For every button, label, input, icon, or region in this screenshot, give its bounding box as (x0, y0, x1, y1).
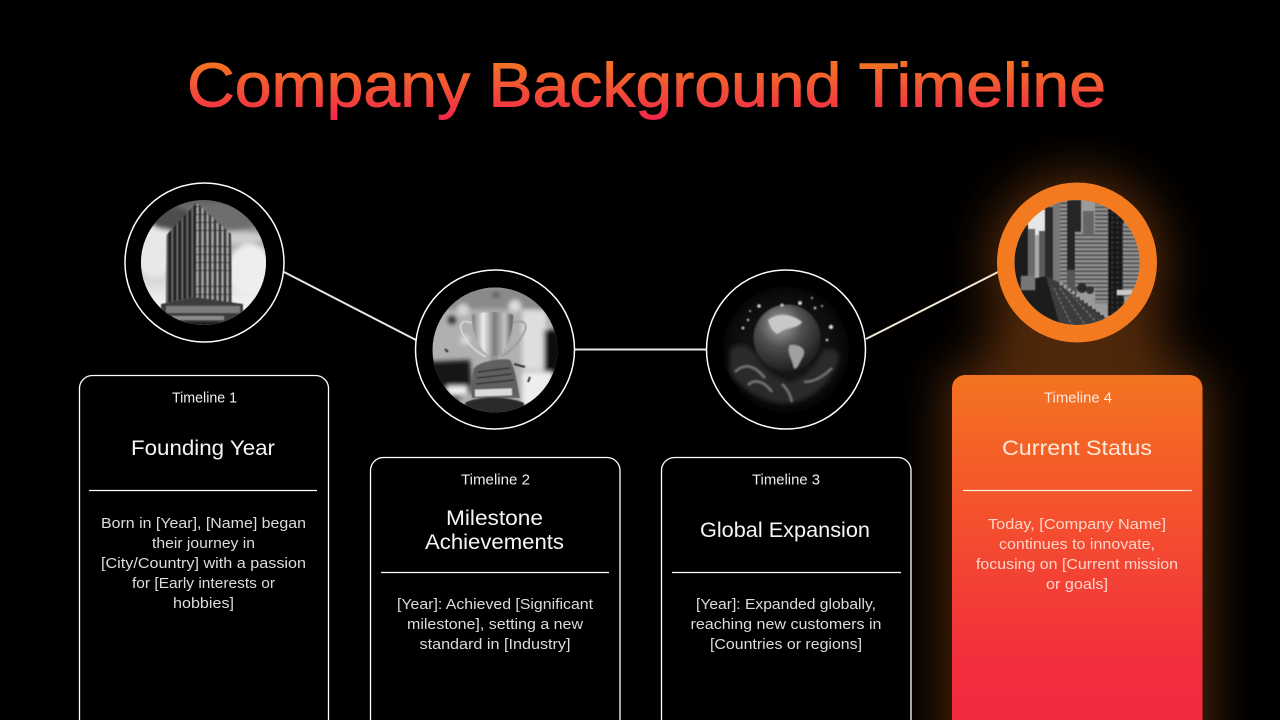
panel: timeline 1 founding year (80, 376, 328, 720)
panel: timeline 3 global expansion (662, 458, 911, 720)
panel: timeline 3 global expansion: Timeline 3 (752, 472, 820, 488)
icon: global expansion globe photo (706, 270, 866, 429)
panel: timeline 2 milestone achievements: standard in [Industry] (420, 637, 570, 653)
panel: timeline 3 global expansion: Global Expansion (700, 518, 870, 542)
panel: timeline 4 current status: Today, [Company Name] (988, 517, 1166, 533)
title: Company Background Timeline (187, 52, 1106, 120)
icon: founding building photo (125, 183, 284, 342)
panel: timeline 3 global expansion: [Countries or regions] (710, 637, 862, 653)
icon: current status city photo (1006, 192, 1148, 334)
panel: timeline 1 founding year: hobbies] (173, 596, 234, 612)
panel: timeline 1 founding year: Born in [Year], [Name] began (101, 516, 306, 532)
panel: timeline 2 milestone achievements: Milestone (446, 506, 543, 530)
panel: timeline 4 current status: focusing on [Current mission (976, 557, 1178, 573)
panel: timeline 3 global expansion: reaching new customers in (690, 617, 882, 633)
connector: milestone 1 to 2 (284, 272, 416, 340)
panel: timeline 4 current status: Timeline 4 (1044, 390, 1112, 406)
panel: timeline 2 milestone achievements: milestone], setting a new (407, 617, 584, 633)
panel: timeline 3 global expansion: [Year]: Expanded globally, (696, 597, 876, 613)
panel: timeline 2 milestone achievements: [Year]: Achieved [Significant (397, 597, 593, 613)
panel: timeline 4 current status: continues to innovate, (999, 537, 1155, 553)
panel: timeline 2 milestone achievements: Timeline 2 (461, 472, 530, 488)
panel: timeline 1 founding year: Timeline 1 (172, 390, 237, 406)
connector: milestone 3 to 4 (866, 271, 1000, 339)
panel: timeline 1 founding year: Founding Year (131, 436, 275, 460)
orange glow behind current status (944, 172, 1210, 720)
panel: timeline 2 milestone achievements (370, 458, 620, 720)
panel: timeline 1 founding year: for [Early interests or (132, 576, 275, 592)
panel: timeline 4 current status: or goals] (1046, 577, 1108, 593)
panel: timeline 4 current status: Current Status (1002, 436, 1152, 460)
icon: milestone trophy photo (416, 270, 574, 429)
panel: timeline 1 founding year: their journey in (152, 536, 255, 552)
connector: milestone 2 to 3 (574, 348, 707, 350)
panel: timeline 1 founding year: [City/Country] with a passion (101, 556, 306, 572)
panel: timeline 4 current status (952, 375, 1202, 720)
panel: timeline 2 milestone achievements: Achievements (425, 530, 564, 554)
